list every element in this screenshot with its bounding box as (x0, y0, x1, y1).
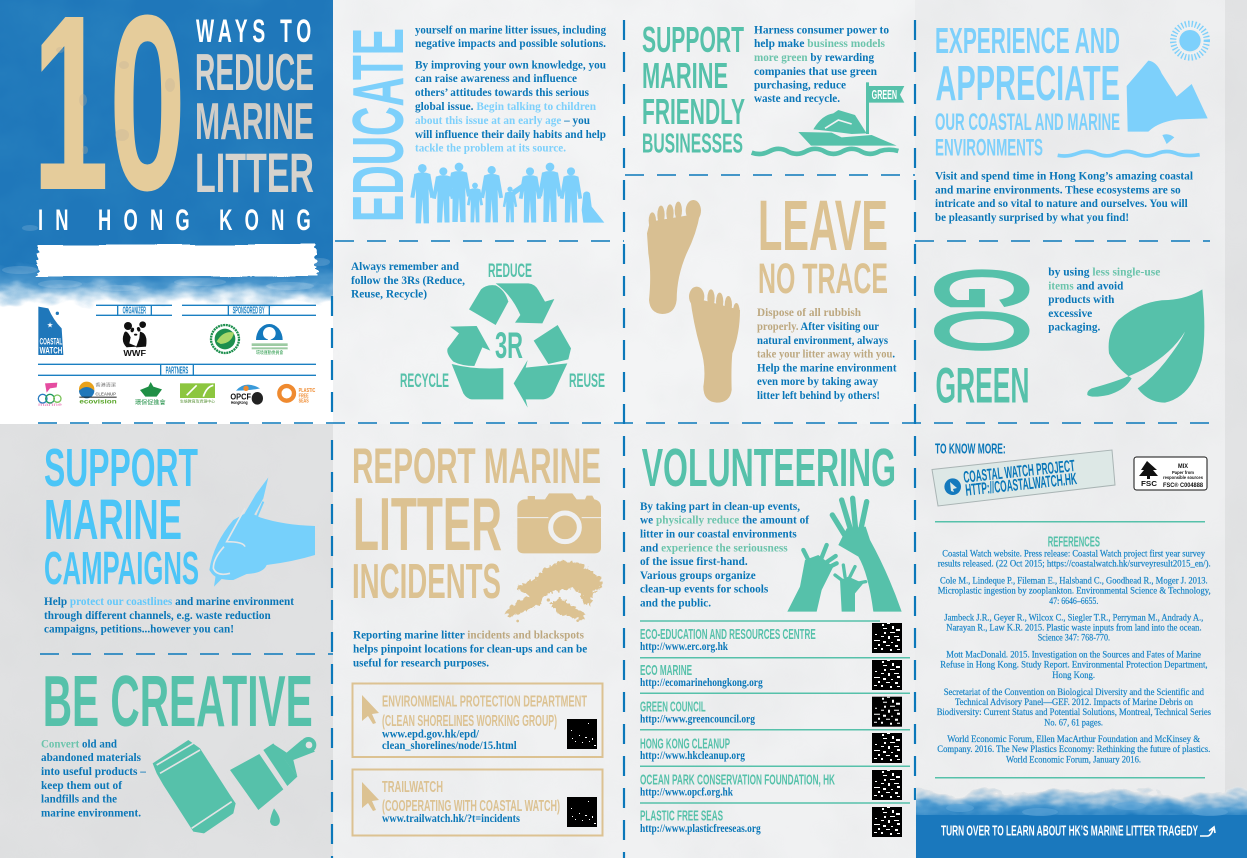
text: references: World Economic Forum, Ellen MacArthur Foundation and McKinsey & (947, 734, 1200, 744)
text: businesses body: waste and recycle. (754, 93, 840, 105)
icon: can and paintbrush (153, 737, 316, 833)
text: volunteering body: and experience the seriousness (640, 542, 788, 554)
list item: Hong Kong Cleanup: http://www.hkcleanup.org (640, 750, 745, 762)
text: educate body (415, 24, 607, 154)
icon: leaf (1087, 289, 1204, 403)
list item: Eco Marine (640, 660, 902, 690)
icon: green boat (752, 82, 904, 154)
panel: experience and appreciate (935, 20, 1208, 224)
logo: OPCF (230, 385, 263, 405)
icon: hand writing (209, 477, 315, 587)
heading: CAMPAIGNS (44, 542, 199, 594)
text: volunteering body: and the public. (640, 598, 711, 610)
heading: REPORT MARINE (352, 438, 601, 494)
text: businesses body: purchasing, reduce (754, 80, 846, 92)
logo: Hong Kong Cleanup / EcoVision (79, 382, 117, 406)
callout: Trailwatch (352, 770, 602, 836)
label: sponsored by (228, 305, 269, 317)
text: experience body: intricate and so vital to nature and ourselves. You will (935, 198, 1188, 210)
text: report body (353, 630, 587, 670)
text: go green body (1048, 266, 1160, 334)
list item: Plastic Free Seas (640, 807, 902, 837)
text: leave no trace body (757, 307, 897, 402)
heading (758, 187, 888, 303)
list item: Plastic Free Seas: http://www.plasticfreeseas.org (640, 823, 761, 835)
panel: leave no trace (647, 187, 897, 403)
title: WAYS TO (196, 13, 316, 49)
text: businesses body (754, 24, 889, 105)
text: go green body: by using less single-use (1048, 266, 1160, 278)
heading: LEAVE (758, 187, 888, 266)
callout: Trailwatch: www.trailwatch.hk/?t=incidents (382, 813, 520, 825)
panel: educate (339, 24, 607, 223)
text: report body: helps pinpoint locations for clean-ups and can be (353, 644, 587, 656)
icon: raised hands (787, 498, 902, 612)
text: educate body: will influence their daily habits and help (415, 129, 606, 141)
text: leave no trace body: properly. After visiting our (757, 321, 879, 333)
text: 3Rs intro: Reuse, Recycle) (351, 288, 427, 300)
logos (38, 305, 316, 407)
logo: OPCF: HongKong (231, 400, 248, 405)
logo: Green Council: 環保促進會 (135, 399, 166, 407)
callout: EPD: clean_shorelines/node/15.html (382, 740, 517, 752)
logo: FSC: FSC (1141, 481, 1157, 488)
list item: Green Council (640, 697, 902, 727)
logo: Green Council (135, 382, 166, 407)
logo: Eco Marine (38, 383, 63, 407)
callout: Coastal Watch project tape (932, 450, 1115, 506)
logo: Coastal Watch: COASTAL (40, 337, 62, 347)
logo: ERC: 生態教育及資源中心 (180, 399, 215, 404)
logo: Environmental Campaign Committee (252, 324, 288, 356)
icon: Hong Kong map (505, 561, 602, 622)
icon: recycling arrows (447, 283, 571, 408)
panel: support marine campaigns (44, 438, 315, 636)
labels: 3R (400, 261, 605, 392)
logo: Eco Marine: marine (38, 402, 63, 407)
heading (352, 438, 601, 609)
logo: Hong Kong Cleanup / EcoVision: ecovision (79, 399, 117, 406)
arrow: turn over (1200, 827, 1215, 836)
list item: Ocean Park Conservation Foundation (640, 770, 902, 800)
list item: Eco-Education and Resources Centre: http://www.erc.org.hk (640, 641, 728, 653)
heading: LITTER (353, 482, 502, 566)
label: organizer: ORGANIZER (123, 306, 146, 317)
list item: Ocean Park Conservation Foundation: http://www.opcf.org.hk (640, 787, 733, 799)
heading: to know more: TO KNOW MORE: (935, 440, 1006, 457)
title: LITTER (195, 141, 314, 204)
logo: ERC (180, 383, 215, 404)
callout: Trailwatch: TRAILWATCH (382, 779, 443, 796)
label: organizer (96, 305, 316, 317)
labels: 3R: RECYCLE (400, 371, 449, 392)
text: creative body: marine environment. (41, 808, 141, 820)
panel: go green (911, 266, 1204, 414)
heading: BE CREATIVE (43, 662, 313, 742)
logo: OPCF: OPCF (230, 392, 251, 402)
text: leave no trace body: natural environment, always (757, 335, 888, 347)
heading: APPRECIATE (936, 57, 1120, 111)
icon: cursor (362, 782, 379, 811)
logo: Plastic Free Seas: SEAS (299, 398, 309, 404)
text: leave no trace body: Help the marine environment (757, 362, 897, 374)
heading: BUSINESSES (642, 128, 743, 158)
label: partners: PARTNERS (166, 365, 188, 376)
QR code: EPD (567, 719, 597, 749)
heading: VOLUNTEERING (642, 438, 896, 498)
title (38, 13, 323, 237)
list item: Ocean Park Conservation Foundation: OCEAN PARK CONSERVATION FOUNDATION, HK (640, 771, 835, 788)
heading: SUPPORT (44, 438, 198, 498)
list: organisations (640, 621, 910, 837)
logo: FSC: MIX (1178, 464, 1188, 470)
labels: 3R: REDUCE (488, 261, 532, 282)
text: references: Coastal Watch website. Press release: Coastal Watch project first year survey (942, 549, 1205, 559)
text: businesses body: more green by rewarding (754, 52, 874, 64)
text: volunteering body: clean-up events for schools (640, 584, 769, 596)
heading: MARINE (642, 55, 728, 96)
text: experience body: and marine environments. These ecosystems are so (935, 184, 1181, 196)
text: educate body: yourself on marine litter issues, including (415, 24, 606, 36)
text: educate body: others’ attitudes towards this serious (415, 87, 590, 99)
logo: Hong Kong Cleanup / EcoVision: CLEANUP (95, 391, 116, 396)
heading (935, 20, 1120, 162)
logo: Coastal Watch: ★ (47, 320, 54, 329)
text: 3Rs intro: follow the 3Rs (Reduce, (351, 275, 465, 287)
logo: FSC (1134, 457, 1207, 490)
heading: GO (911, 268, 1052, 352)
title: MARINE (195, 93, 314, 151)
callout: Trailwatch: (COOPERATING WITH COASTAL WATCH) (382, 798, 560, 815)
text: campaigns body: Help protect our coastlines and marine environment (44, 596, 294, 608)
title: IN HONG KONG (38, 204, 323, 237)
text: educate body: global issue. Begin talking to children (415, 101, 597, 113)
text: references: World Economic Forum, January 2016. (1006, 754, 1141, 764)
text: experience body (935, 170, 1193, 224)
text: references: 47: 6646–6655. (1049, 596, 1098, 606)
text: experience body: Visit and spend time in Hong Kong’s amazing coastal (935, 170, 1193, 182)
text: experience body: be pleasantly surprised by what you find! (935, 212, 1129, 224)
text: go green body: excessive (1048, 308, 1092, 320)
logos: SPONSORED BY (233, 306, 265, 317)
text: references: results released. (22 Oct 2015; https://coastalwatch.hk/surveyresult2015_en/). (938, 559, 1211, 569)
icon: family silhouettes (410, 163, 604, 223)
text: volunteering body: of the issue first-hand. (640, 556, 748, 568)
logo: Plastic Free Seas: FREE (299, 393, 309, 399)
logo: FSC: responsible sources (1163, 475, 1203, 480)
list item: Green Council: http://www.greencouncil.org (640, 714, 755, 726)
heading: MARINE (44, 488, 182, 552)
heading: references: REFERENCES (1048, 534, 1100, 551)
icon: cursor (362, 695, 379, 724)
list item: Hong Kong Cleanup: HONG KONG CLEANUP (640, 735, 730, 752)
text: businesses body: Harness consumer power to (754, 24, 889, 36)
text: references: Technical Advisory Panel—GEF. 2012. Impacts of Marine Debris on (955, 697, 1193, 707)
list item: Eco Marine: ECO MARINE (640, 662, 692, 679)
text: references: No. 67, 61 pages. (1044, 717, 1103, 727)
text: go green body: packaging. (1048, 322, 1100, 334)
heading: ENVIRONMENTS (935, 135, 1043, 162)
label: partners (38, 364, 316, 376)
text: volunteering body (640, 501, 809, 610)
logo: Coastal Watch: WATCH (40, 345, 63, 355)
panel: cover (0, 0, 353, 424)
text: references (937, 549, 1211, 764)
text: educate body: negative impacts and possible solutions. (415, 38, 606, 50)
text: leave no trace body: take your litter away with you. (757, 348, 895, 360)
text: references: Microplastic ingestion by zooplankton. Environmental Science & Technology, (938, 586, 1211, 596)
text: references: Hong Kong. (1052, 670, 1095, 680)
text: volunteering body: By taking part in clean-up events, (640, 501, 800, 513)
text: campaigns body: through different channels, e.g. waste reduction (44, 610, 271, 622)
heading: GREEN (936, 358, 1030, 414)
text: references: Company. 2016. The New Plastics Economy: Rethinking the future of plastics. (937, 744, 1210, 754)
text: campaigns body: campaigns, petitions...however you can! (44, 624, 234, 636)
icon: sun and island (1058, 24, 1208, 156)
logo: FSC: FSC® C004888 (1163, 482, 1204, 489)
text: references: Biodiversity: Current Status and Potential Solutions, Montreal, Technical Series (937, 707, 1211, 717)
text: leave no trace body: even more by taking away (757, 376, 878, 388)
text: references: Narayan R., Law K.R. 2015. Plastic waste inputs from land into the ocean. (946, 623, 1202, 633)
panel: report marine litter incidents (352, 438, 602, 836)
text: creative body: abandoned materials (41, 752, 141, 764)
text: leave no trace body: litter left behind by others! (757, 390, 880, 402)
list item: Eco Marine: http://ecomarinehongkong.org (640, 677, 763, 689)
text: creative body: keep them out of (41, 780, 122, 792)
list item: Green Council: GREEN COUNCIL (640, 699, 706, 716)
text: creative body: landfills and the (41, 794, 117, 806)
text: volunteering body: litter in our coastal environments (640, 528, 797, 540)
text: go green body: products with (1048, 294, 1115, 306)
big number 10 (32, 0, 186, 242)
callout: EPD: (CLEAN SHORELINES WORKING GROUP) (382, 713, 557, 730)
panel: to know more and references (900, 440, 1247, 858)
callout: EPD: ENVIRONMENAL PROTECTION DEPARTMENT (382, 694, 587, 711)
text: report body: useful for research purposes. (353, 658, 489, 670)
list item: Eco-Education and Resources Centre (640, 623, 902, 653)
text: volunteering body: Various groups organize (640, 570, 756, 582)
logo: Plastic Free Seas (279, 386, 315, 404)
list item: Hong Kong Cleanup (640, 733, 902, 763)
panel: volunteering (640, 438, 910, 837)
logo: Hong Kong Cleanup / EcoVision: 香港清潔 (95, 382, 116, 389)
logo: FSC: Paper from (1172, 470, 1194, 475)
text: report body: Reporting marine litter incidents and blackspots (353, 630, 585, 642)
logo: WWF panda (123, 321, 147, 358)
icon: camera (517, 493, 601, 553)
logo: WWF panda: WWF (123, 349, 146, 358)
footer band (900, 792, 1247, 858)
panel: support marine friendly businesses (642, 19, 904, 158)
text: campaigns body (44, 596, 294, 636)
callout: Coastal Watch project tape: HTTP://COASTALWATCH.HK (965, 470, 1078, 500)
text: 3Rs intro (351, 261, 465, 300)
list item: Plastic Free Seas: PLASTIC FREE SEAS (640, 808, 723, 825)
heading: FRIENDLY (642, 91, 745, 132)
text: leave no trace body: Dispose of all rubbish (757, 307, 862, 319)
panel: 3Rs (351, 261, 605, 408)
text: creative body: into useful products – (41, 766, 146, 778)
panel: be creative (41, 662, 316, 833)
callout: EPD (352, 684, 602, 757)
logo: Plastic Free Seas: PLASTIC (299, 388, 315, 394)
text: businesses body: help make business models (754, 38, 886, 50)
text: references: Jambeck J.R., Geyer R., Wilcox C., Siegler T.R., Perryman M., Andrady A., (944, 613, 1203, 623)
text: educate body: By improving your own knowledge, you (415, 60, 607, 72)
heading: NO TRACE (758, 255, 888, 303)
text: references: Secretariat of the Convention on Biological Diversity and the Scientific and (944, 687, 1204, 697)
text: references: Cole M., Lindeque P., Fileman E., Halsband C., Goodhead R., Moger J. 2013. (940, 576, 1208, 586)
QR code: Trailwatch (567, 797, 597, 827)
text: 3Rs intro: Always remember and (351, 261, 460, 273)
callout: Coastal Watch project tape: COASTAL WATCH PROJECT (963, 457, 1076, 487)
white brush stroke (38, 245, 316, 276)
heading: SUPPORT (642, 19, 744, 60)
title: REDUCE (195, 44, 314, 102)
heading: INCIDENTS (352, 555, 501, 609)
logo: Environmental Campaign Committee: 環境運動委員會 (256, 349, 284, 356)
text: businesses body: companies that use green (754, 66, 878, 78)
text: go green body: items and avoid (1048, 280, 1124, 292)
list item: Eco-Education and Resources Centre: ECO-EDUCATION AND RESOURCES CENTRE (640, 626, 816, 643)
text: creative body (41, 738, 146, 820)
text: volunteering body: we physically reduce the amount of (640, 515, 809, 527)
text: educate body: about this issue at an early age – you (415, 115, 591, 127)
text: references: Refuse in Hong Kong. Study Report. Environmental Protection Department, (940, 660, 1208, 670)
heading: EXPERIENCE AND (935, 20, 1120, 61)
text: educate body: tackle the problem at its source. (415, 142, 566, 154)
text: creative body: Convert old and (41, 738, 118, 750)
icon: green boat: GREEN (872, 88, 897, 102)
labels: 3R: REUSE (569, 371, 605, 392)
heading (642, 19, 745, 158)
text: references: Mott MacDonald. 2015. Investigation on the Sources and Fates of Marine (946, 650, 1201, 660)
logo: green sponsor seal (211, 325, 239, 353)
icon: footprints (647, 200, 740, 403)
text: educate body: can raise awareness and influence (415, 73, 577, 85)
logo: Coastal Watch (38, 307, 63, 355)
text: references: Science 347: 768-770. (1038, 633, 1110, 643)
labels: 3R: 3R (495, 325, 523, 366)
heading (44, 438, 199, 594)
callout: EPD: www.epd.gov.hk/epd/ (382, 728, 480, 740)
